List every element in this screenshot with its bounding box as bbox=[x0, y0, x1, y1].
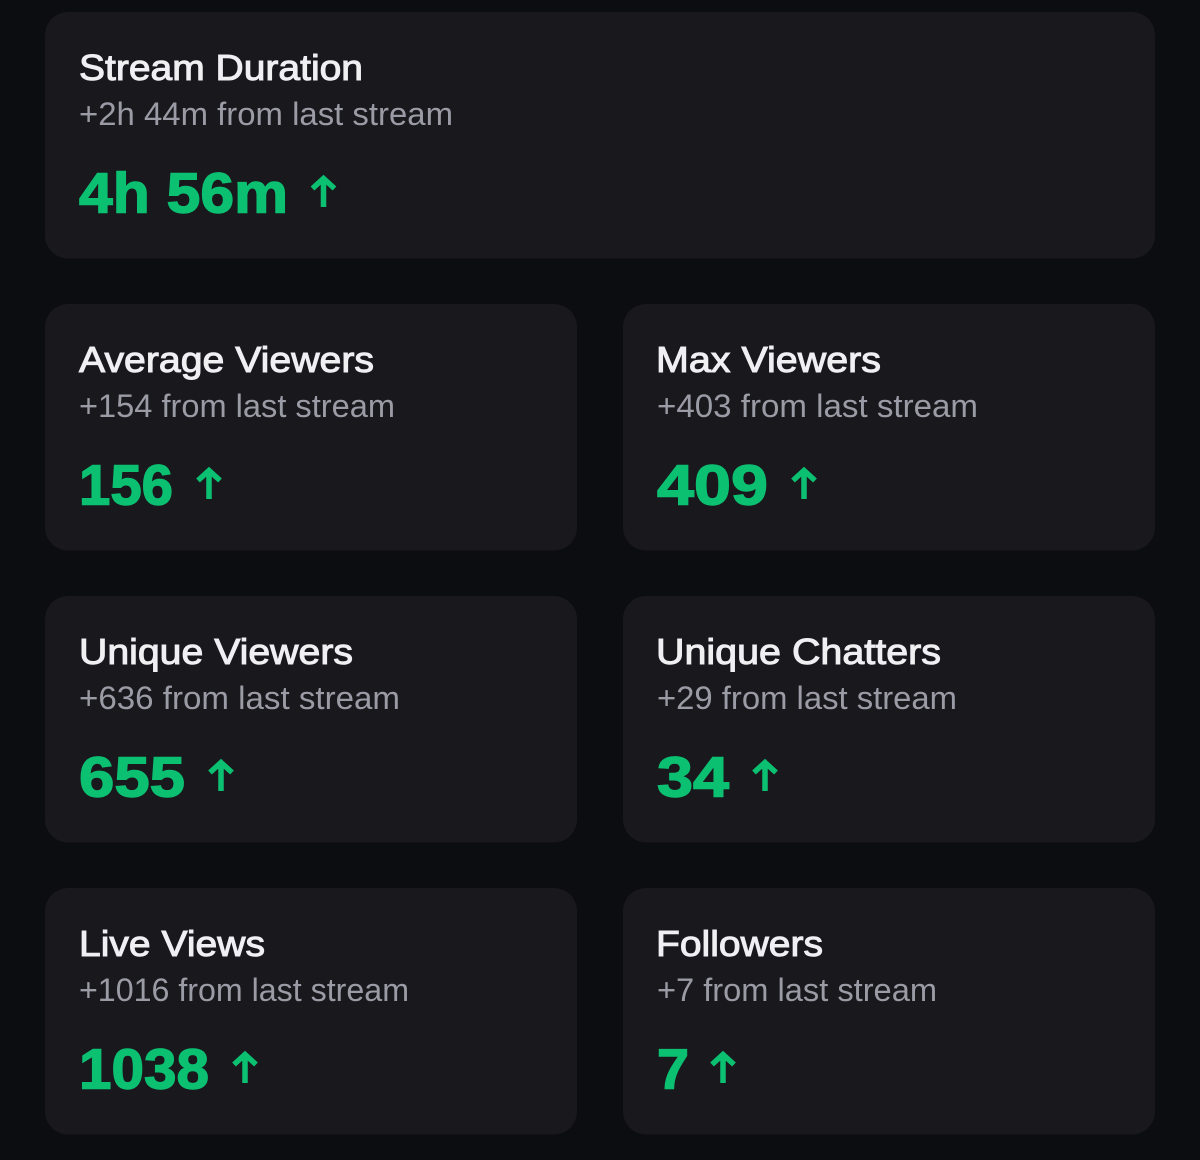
panel: live views bbox=[45, 888, 577, 1134]
value: max viewers: 409 bbox=[657, 454, 768, 518]
icon: up arrow bbox=[793, 470, 815, 499]
text: average viewers change: +154 from last stream bbox=[79, 388, 395, 424]
text: live views change: +1016 from last stream bbox=[79, 972, 409, 1008]
heading: live views: Live Views bbox=[79, 923, 265, 964]
text: duration change: +2h 44m from last stream bbox=[79, 96, 453, 132]
value: duration: 4h 56m bbox=[79, 162, 288, 226]
heading: average viewers: Average Viewers bbox=[79, 339, 374, 380]
icon: up arrow bbox=[234, 1054, 256, 1083]
panel: max viewers bbox=[623, 304, 1155, 550]
text: unique chatters change: +29 from last stream bbox=[657, 680, 957, 716]
text: max viewers change: +403 from last stream bbox=[657, 388, 978, 424]
heading: followers: Followers bbox=[656, 923, 823, 964]
value: unique chatters: 34 bbox=[657, 746, 729, 810]
value: followers: 7 bbox=[657, 1038, 689, 1102]
panel: unique viewers bbox=[45, 596, 577, 842]
heading: stream duration: Stream Duration bbox=[79, 47, 363, 88]
heading: unique chatters: Unique Chatters bbox=[656, 631, 941, 672]
text: unique viewers change: +636 from last stream bbox=[79, 680, 400, 716]
value: average viewers: 156 bbox=[79, 454, 173, 518]
value: unique viewers: 655 bbox=[79, 746, 185, 810]
icon: up arrow bbox=[712, 1054, 734, 1083]
text: followers change: +7 from last stream bbox=[657, 972, 937, 1008]
icon: up arrow bbox=[210, 762, 232, 791]
panel: average viewers bbox=[45, 304, 577, 550]
icon: up arrow bbox=[198, 470, 220, 499]
panel: stream duration bbox=[45, 12, 1155, 258]
heading: max viewers: Max Viewers bbox=[656, 339, 881, 380]
heading: unique viewers: Unique Viewers bbox=[79, 631, 353, 672]
icon: up arrow bbox=[754, 762, 776, 791]
value: live views: 1038 bbox=[79, 1038, 209, 1102]
icon: up arrow bbox=[312, 178, 334, 207]
panel: followers bbox=[623, 888, 1155, 1134]
panel: unique chatters bbox=[623, 596, 1155, 842]
